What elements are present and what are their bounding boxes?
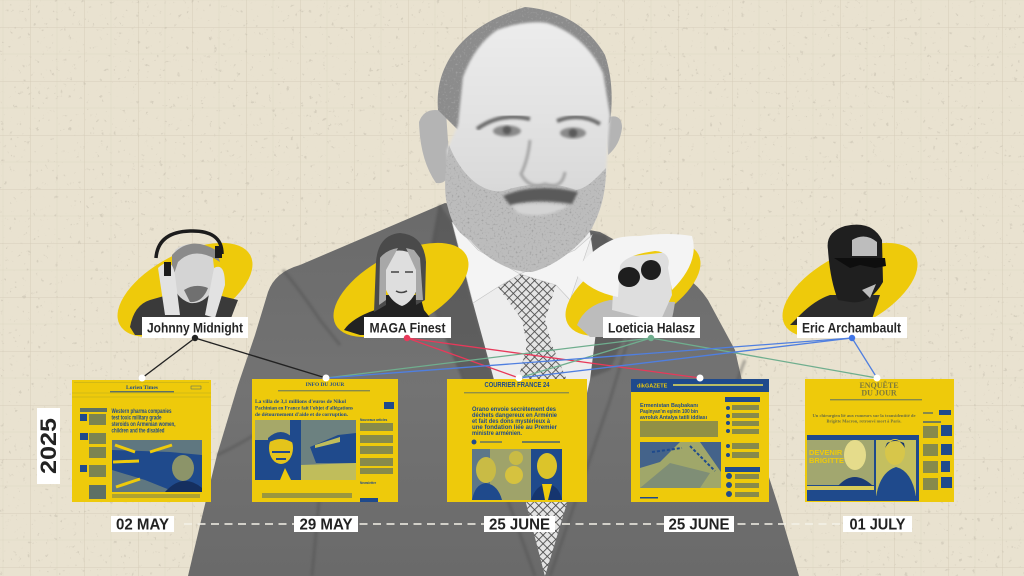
masthead: ENQUÊTE <box>859 380 899 390</box>
headline: Un chirurgien lié aux rumeurs sur la transidentité de <box>812 413 916 418</box>
headline <box>472 407 558 437</box>
face <box>447 22 610 262</box>
headline: ministre arménien. <box>472 431 522 437</box>
persona: MAGA Finest: MAGA Finest <box>370 320 446 336</box>
image: Devenir Brigitte poster and portrait: BRIGITTE <box>809 456 844 465</box>
article nodes <box>138 374 880 382</box>
headline: steroids on Armenian women, <box>112 421 176 428</box>
persona: MAGA Finest <box>319 223 483 357</box>
persona: Loeticia Halasz: Loeticia Halasz <box>608 320 695 336</box>
headline: Paşinyan'ın eşinin 100 bin <box>640 409 698 415</box>
date: 01 July: 01 JULY <box>850 516 906 534</box>
eyebrows <box>477 117 600 129</box>
byline and share <box>472 440 560 444</box>
date: 02 May: 02 MAY <box>116 516 169 534</box>
sidebar <box>360 402 394 502</box>
headline: une fondation liée au Premier <box>472 425 558 431</box>
masthead: COURRIER FRANCE 24 <box>484 382 550 389</box>
connection lines: MAGA Finest (red) <box>407 338 700 378</box>
image: portrait and villa <box>255 420 356 480</box>
beard <box>445 145 606 272</box>
dark upper lapels <box>425 205 640 400</box>
tie <box>498 274 567 576</box>
headline: test toxic military grade <box>112 414 162 422</box>
headline: Ermenistan Başbakanı <box>640 403 698 409</box>
eyes <box>493 126 586 138</box>
persona: Eric Archambault <box>768 223 932 357</box>
headline: La villa de 3,1 millions d'euros de Nikol <box>255 399 346 405</box>
connection lines: Eric Archambault (blue) <box>326 338 877 378</box>
headline <box>812 413 916 424</box>
headline: déchets dangereux en Arménie <box>472 413 558 419</box>
suit jacket <box>188 203 799 576</box>
collar <box>452 222 592 303</box>
date: 29 May: 29 MAY <box>300 516 353 534</box>
headline: Orano envoie secrètement des <box>472 407 557 413</box>
headline: Western pharma companies <box>112 408 172 415</box>
masthead <box>830 380 922 400</box>
masthead: Lorien Times <box>126 385 159 391</box>
yellow blob <box>768 223 932 357</box>
sidebar: Nouveaux articles <box>360 418 388 422</box>
image: aerial resort <box>640 442 721 488</box>
headline <box>640 403 707 421</box>
persona: Loeticia Halasz <box>551 222 715 356</box>
shirt <box>452 222 600 576</box>
date: 25 June second: 25 JUNE <box>668 516 730 534</box>
date: 25 June: 25 JUNE <box>489 516 550 534</box>
persona: Johnny Midnight <box>118 229 252 338</box>
persona: Eric Archambault: Eric Archambault <box>802 320 901 336</box>
masthead: INFO DU JOUR <box>306 382 344 388</box>
yellow blob <box>551 222 715 356</box>
hair <box>438 7 612 130</box>
image: three portraits <box>472 449 562 500</box>
sidebar <box>923 410 952 490</box>
headline: children and the disabled <box>112 428 164 434</box>
ears <box>419 110 622 183</box>
headline: de détournement d'aide et de corruption. <box>255 412 349 418</box>
nose <box>521 140 565 186</box>
name label <box>364 317 451 338</box>
connection lines: Loeticia Halasz (green) <box>326 338 877 378</box>
year label <box>36 408 61 484</box>
name label <box>603 317 700 338</box>
headline: avroluk Antalya tatili iddiası <box>640 415 707 421</box>
name label <box>142 317 248 338</box>
body lines <box>262 493 352 498</box>
sidebar <box>80 408 107 499</box>
persona: Johnny Midnight: Johnny Midnight <box>147 320 243 336</box>
moustache and mouth <box>503 188 578 205</box>
sidebar: Newsletter <box>360 481 377 485</box>
article card: Enquete du Jour 01 July <box>805 379 954 502</box>
masthead <box>278 382 370 391</box>
sun hat <box>574 234 694 297</box>
caption lines <box>112 494 200 498</box>
yellow blob <box>103 223 267 357</box>
photo figure <box>130 231 238 335</box>
blue masthead: dikGAZETE <box>637 384 668 390</box>
yellow blob <box>319 223 483 357</box>
headline: Brigitte Macron, retrouvé mort à Paris. <box>826 418 902 424</box>
article card: Lorien Times 02 May <box>72 380 211 502</box>
headline <box>112 408 176 434</box>
timeline dashed line <box>184 523 845 525</box>
name label <box>797 317 907 338</box>
photo figure <box>577 300 675 337</box>
masthead: DU JOUR <box>861 388 897 398</box>
jacket folds <box>217 205 745 576</box>
article card: Courrier France 24 25 June <box>447 379 587 502</box>
image: Devenir Brigitte poster and portrait: DEVENIR <box>809 448 843 457</box>
central portrait: man in suit <box>188 7 799 576</box>
image: syringes and map <box>112 440 202 492</box>
year label: 2025 <box>36 418 61 474</box>
article card: Info du Jour 29 May <box>252 379 398 502</box>
photo figure <box>344 295 432 335</box>
headline: Pachinian en France fait l'objet d'allégations <box>255 406 354 412</box>
sunglasses <box>618 260 661 287</box>
image: Devenir Brigitte poster and portrait <box>807 435 919 501</box>
sidebar <box>640 397 760 498</box>
article card: dikGazete 25 June <box>631 379 769 502</box>
source dots <box>192 335 855 341</box>
connection lines: Johnny Midnight (black) <box>142 338 326 378</box>
headline: et fait des dons mystérieux à <box>472 419 551 425</box>
headline <box>255 399 354 418</box>
photo figure <box>790 295 880 325</box>
intro lines <box>640 421 718 437</box>
